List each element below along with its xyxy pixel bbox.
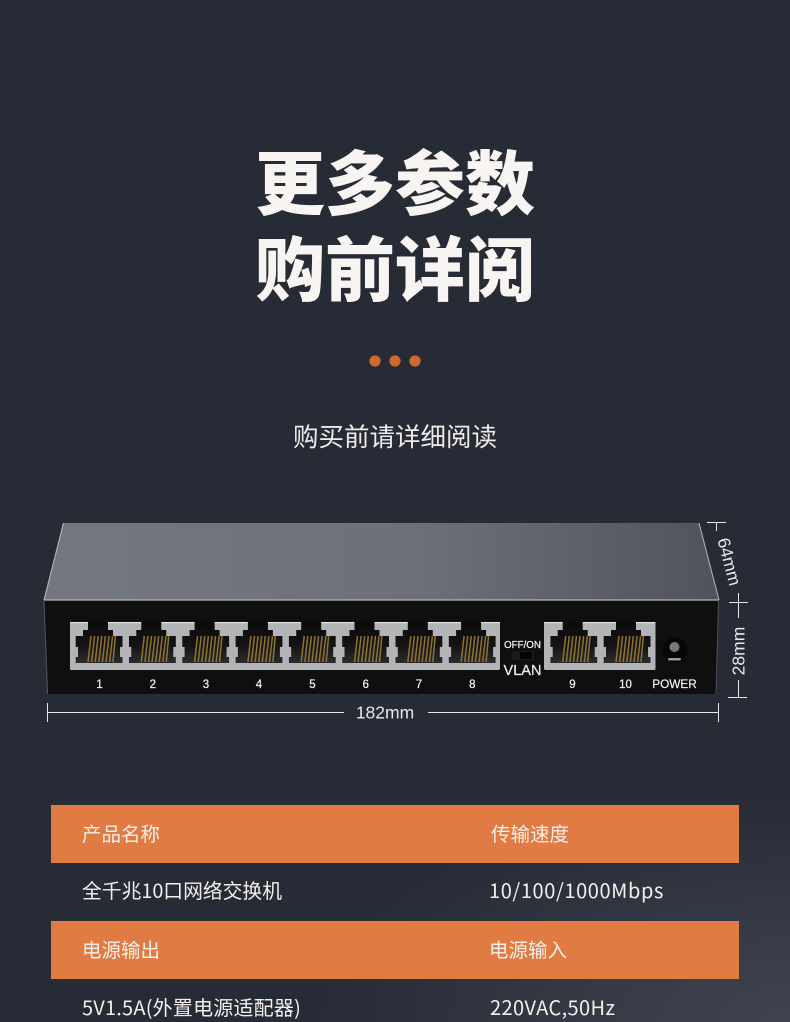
title: second line: 购前详阅 — [255, 215, 535, 316]
table value: power output: 5V1.5A(外置电源适配器) — [82, 992, 301, 1021]
depth dimension 64mm — [707, 522, 745, 588]
ethernet ports 9 and 10 — [544, 622, 656, 670]
table header: product name: 产品名称 — [82, 818, 160, 847]
table header: power output: 电源输出 — [82, 934, 160, 963]
port number labels: 5 — [309, 679, 316, 691]
table row 2 header bar — [51, 921, 739, 979]
port number labels: 9 — [569, 679, 576, 691]
decorative three orange dots — [369, 355, 421, 367]
width dimension 182mm — [47, 702, 719, 722]
table value: transfer speed: 10/100/1000Mbps — [489, 875, 664, 904]
ethernet ports 1 to 8 — [70, 622, 500, 670]
height dimension 28mm — [728, 593, 748, 698]
switch front panel — [44, 600, 719, 694]
port number labels: 1 — [96, 679, 103, 691]
VLAN switch label: VLAN — [504, 663, 541, 679]
subtitle: 购买前请详细阅读 — [293, 417, 497, 454]
switch top face — [44, 523, 719, 600]
table row 1 header bar — [51, 805, 739, 863]
table value: product name: 全千兆10口网络交换机 — [82, 875, 282, 904]
product diagram: network switch with dimensions — [44, 522, 748, 722]
power socket: POWER — [652, 677, 697, 691]
VLAN switch label — [504, 640, 541, 679]
port number labels: 3 — [203, 679, 209, 691]
port number labels: 6 — [362, 679, 369, 691]
table header: power input: 电源输入 — [489, 934, 567, 963]
port number labels: 8 — [469, 679, 476, 691]
VLAN switch label: OFF/ON — [504, 640, 541, 651]
power socket — [652, 638, 697, 691]
port number labels: 2 — [150, 679, 156, 691]
port number labels: 7 — [416, 679, 422, 691]
width dimension 182mm: 182mm — [356, 702, 414, 722]
depth dimension 64mm: 64mm — [713, 536, 745, 588]
port number labels: 4 — [256, 679, 263, 691]
table value: power input: 220VAC,50Hz — [490, 992, 615, 1021]
port number labels — [96, 679, 632, 691]
height dimension 28mm: 28mm — [728, 627, 748, 675]
table header: transfer speed: 传输速度 — [491, 818, 569, 847]
title: first line: 更多参数 — [255, 129, 535, 230]
port number labels: 10 — [619, 679, 632, 691]
